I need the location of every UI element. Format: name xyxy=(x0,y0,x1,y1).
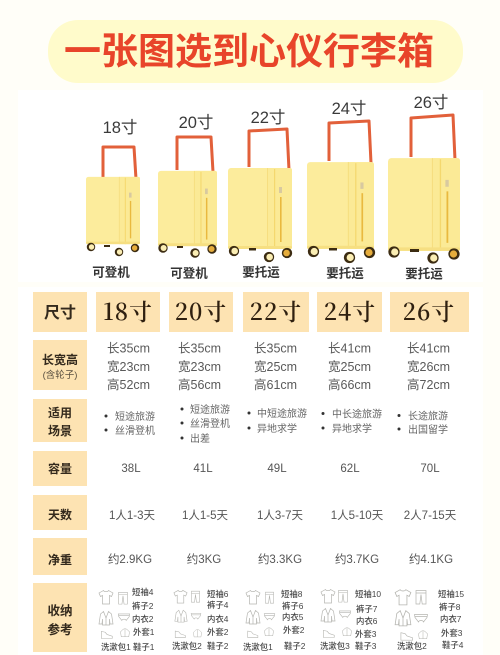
row: size: 20寸 xyxy=(175,294,227,327)
packing: 22 inch: 裤子6 xyxy=(282,601,304,611)
packing: 26 inch xyxy=(395,589,464,651)
title banner: 一张图选到心仪行李箱 xyxy=(64,31,434,72)
row: capacity: 41L xyxy=(193,463,213,475)
row: packing reference: 参考 xyxy=(47,622,73,637)
row: net weight: 约3.3KG xyxy=(258,552,302,566)
packing: 20 inch: 鞋子2 xyxy=(207,641,229,651)
packing: 26 inch: 裤子8 xyxy=(439,602,461,612)
row: dimensions: 宽23cm xyxy=(178,359,221,374)
row: capacity: 38L xyxy=(121,463,141,475)
row: days: 2人7-15天 xyxy=(404,509,457,522)
row: net weight: 约3.7KG xyxy=(335,552,379,566)
row: size: 26寸 xyxy=(403,294,455,327)
packing: 18 inch xyxy=(99,587,155,652)
packing: 18 inch: 内衣2 xyxy=(132,614,154,624)
row: dimensions: 长41cm xyxy=(407,342,450,356)
packing: 22 inch: 短袖8 xyxy=(281,589,303,599)
packing: 26 inch: 洗漱包2 xyxy=(397,641,427,651)
row: capacity xyxy=(33,451,440,486)
suitcase: 18 inch: 可登机 xyxy=(92,264,130,280)
row: use cases: 短途旅游 xyxy=(115,410,155,423)
row: capacity: 49L xyxy=(267,463,287,475)
suitcase: 22 inch: 要托运 xyxy=(242,264,280,280)
row: capacity: 容量 xyxy=(48,461,72,476)
suitcase: 22 inch: 22寸 xyxy=(251,108,285,127)
row: capacity: 62L xyxy=(340,463,360,475)
packing: 20 inch: 外套2 xyxy=(207,627,229,637)
suitcase: 20 inch xyxy=(158,113,217,280)
packing: 24 inch: 外套3 xyxy=(355,629,377,639)
row: use cases: 异地求学 xyxy=(332,422,372,435)
row: use cases: 适用 xyxy=(48,405,72,420)
row: dimensions: (含轮子) xyxy=(43,369,77,381)
row: size: 尺寸 xyxy=(44,303,76,322)
row: use cases: 长途旅游 xyxy=(408,410,448,422)
packing: 24 inch: 内衣6 xyxy=(356,616,378,626)
packing: 22 inch: 洗漱包1 xyxy=(243,642,273,652)
packing: 24 inch: 短袖10 xyxy=(355,589,381,599)
row: use cases: 中短途旅游 xyxy=(257,407,307,420)
row: use cases: 场景 xyxy=(48,424,72,438)
packing: 24 inch: 裤子7 xyxy=(356,604,378,614)
row: net weight: 净重 xyxy=(48,552,72,567)
packing: 24 inch: 洗漱包3 xyxy=(320,641,350,651)
row: dimensions: 高72cm xyxy=(407,377,450,392)
row: size: 18寸 xyxy=(103,294,153,327)
row: size: 22寸 xyxy=(250,294,302,327)
row: use cases: 出差 xyxy=(190,432,210,445)
row: dimensions: 宽23cm xyxy=(107,359,150,374)
row: days: 天数 xyxy=(48,507,72,522)
row: dimensions: 高61cm xyxy=(254,377,297,392)
row: dimensions xyxy=(33,340,450,392)
row: dimensions: 长35cm xyxy=(178,342,221,356)
row: use cases: 出国留学 xyxy=(408,423,448,436)
row: days: 1人1-3天 xyxy=(109,509,156,522)
row: use cases: 丝滑登机 xyxy=(190,417,230,430)
row: days: 1人5-10天 xyxy=(331,509,384,522)
row: use cases: 丝滑登机 xyxy=(115,424,155,437)
row: size xyxy=(33,292,469,332)
row: days xyxy=(33,495,457,530)
row: net weight xyxy=(33,538,453,575)
row: dimensions: 宽26cm xyxy=(407,359,450,374)
packing: 18 inch: 裤子2 xyxy=(132,601,154,611)
packing: 26 inch: 短袖15 xyxy=(438,589,464,599)
packing: 26 inch: 外套3 xyxy=(441,628,463,638)
row: days: 1人1-5天 xyxy=(182,509,229,522)
row: dimensions: 高56cm xyxy=(178,377,221,392)
packing: 18 inch: 外套1 xyxy=(133,627,155,637)
packing: 18 inch: 短袖4 xyxy=(132,587,154,597)
row: use cases: 中长途旅游 xyxy=(332,408,382,420)
packing: 24 inch xyxy=(320,589,381,651)
row: packing reference: 收纳 xyxy=(47,603,73,618)
row: dimensions: 长41cm xyxy=(328,342,371,356)
suitcase: 24 inch: 要托运 xyxy=(326,266,364,280)
row: dimensions: 长35cm xyxy=(254,342,297,356)
packing: 18 inch: 鞋子1 xyxy=(133,642,155,652)
row: dimensions: 长宽高 xyxy=(42,352,78,367)
suitcase: 24 inch xyxy=(307,99,375,280)
row: dimensions: 宽25cm xyxy=(254,359,297,374)
suitcase: 26 inch: 要托运 xyxy=(405,266,443,281)
suitcase: 18 inch: 18寸 xyxy=(103,118,137,137)
packing: 20 inch: 洗漱包2 xyxy=(172,641,202,651)
packing: 20 inch: 内衣4 xyxy=(207,614,229,624)
packing: 20 inch xyxy=(172,589,229,651)
title banner xyxy=(48,20,463,83)
packing: 20 inch: 裤子4 xyxy=(207,600,229,610)
suitcase: 18 inch xyxy=(86,118,140,280)
row: size: 24寸 xyxy=(324,294,376,327)
packing: 22 inch xyxy=(243,589,306,652)
packing: 26 inch: 鞋子4 xyxy=(442,640,464,650)
row: dimensions: 高52cm xyxy=(107,377,150,392)
row: dimensions: 高66cm xyxy=(328,377,371,392)
row: capacity: 70L xyxy=(420,463,440,475)
packing: 24 inch: 鞋子3 xyxy=(355,641,377,651)
row: net weight: 约2.9KG xyxy=(108,552,152,566)
row: packing reference xyxy=(33,583,464,652)
suitcase: 22 inch xyxy=(228,108,292,280)
suitcase: 20 inch: 20寸 xyxy=(179,113,213,132)
packing: 22 inch: 内衣5 xyxy=(282,612,304,622)
suitcase: 24 inch: 24寸 xyxy=(332,99,366,118)
row: use cases: 短途旅游 xyxy=(190,403,230,416)
suitcase: 26 inch xyxy=(388,93,460,281)
packing: 22 inch: 外套2 xyxy=(283,625,305,635)
row: net weight: 约4.1KG xyxy=(409,552,453,566)
suitcase: 26 inch: 26寸 xyxy=(414,93,448,112)
row: net weight: 约3KG xyxy=(187,552,221,566)
row: dimensions: 长35cm xyxy=(107,342,150,356)
suitcase: 20 inch: 可登机 xyxy=(170,266,208,280)
packing: 18 inch: 洗漱包1 xyxy=(101,642,131,652)
packing: 22 inch: 鞋子2 xyxy=(284,641,306,651)
row: use cases: 异地求学 xyxy=(257,422,297,435)
packing: 26 inch: 内衣7 xyxy=(440,614,462,624)
row: use cases xyxy=(33,399,448,445)
packing: 20 inch: 短袖6 xyxy=(207,589,229,599)
row: days: 1人3-7天 xyxy=(257,509,304,522)
row: dimensions: 宽25cm xyxy=(328,359,371,374)
